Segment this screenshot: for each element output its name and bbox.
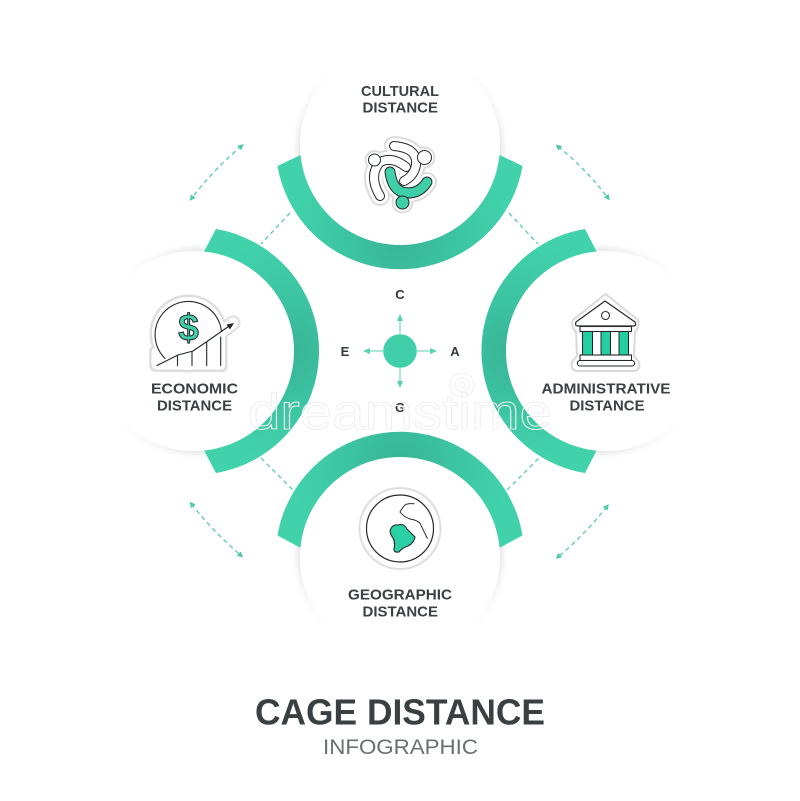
heading [348,586,452,620]
heading: DISTANCE [362,100,438,116]
heading: GEOGRAPHIC [348,586,452,604]
heading [151,380,238,414]
icon: money growth chart [149,294,234,372]
compass letters: A [450,344,460,359]
arrow: top-right dashed double arrow [558,146,608,198]
icon: government building [572,294,639,371]
heading [542,380,670,414]
teal ring segment [278,136,522,269]
connector: bottom-left dashed line [261,458,293,490]
icon: people in a circle [364,146,436,214]
compass letters: G [395,400,405,415]
connector: top-left dashed line [261,213,290,244]
compass letters [341,287,460,415]
circle shadow [91,248,297,454]
connector: bottom-right dashed line [507,458,539,490]
white circle [94,251,294,451]
teal ring segment [481,229,617,473]
title: CAGE DISTANCE [255,692,545,732]
white circle [506,251,706,451]
heading: CULTURAL [361,83,439,100]
teal ring segment [183,229,319,473]
heading: ECONOMIC [151,380,238,398]
center dot [383,334,417,368]
heading: DISTANCE [157,398,232,414]
panel: economic distance [91,229,319,473]
heading: DISTANCE [362,604,438,620]
panel: cultural distance [278,42,522,269]
panel: administrative distance [481,229,709,473]
compass: central CAGE diagram [341,287,460,415]
icon: globe [360,488,440,569]
subtitle: INFOGRAPHIC [323,735,478,759]
connector: top-right dashed line [509,213,538,244]
compass letters: E [341,344,350,359]
white circle [300,45,500,245]
heading: ADMINISTRATIVE [542,380,670,398]
panel: geographic distance [278,432,522,660]
compass letters: C [395,287,405,302]
circle shadow [297,454,503,660]
teal ring segment [278,432,522,569]
arrow: top-left dashed double arrow [192,146,242,198]
icon: money growth chart: $ [178,307,199,348]
compass arrows [363,314,437,388]
arrow: bottom-left dashed double arrow [192,504,241,556]
heading: DISTANCE [570,398,644,414]
arrow: bottom-right dashed double arrow [558,506,607,557]
circle shadow [297,42,503,248]
watermark: dreamstime [248,384,552,440]
heading [361,83,439,116]
circle shadow [503,248,709,454]
white circle [300,457,500,657]
